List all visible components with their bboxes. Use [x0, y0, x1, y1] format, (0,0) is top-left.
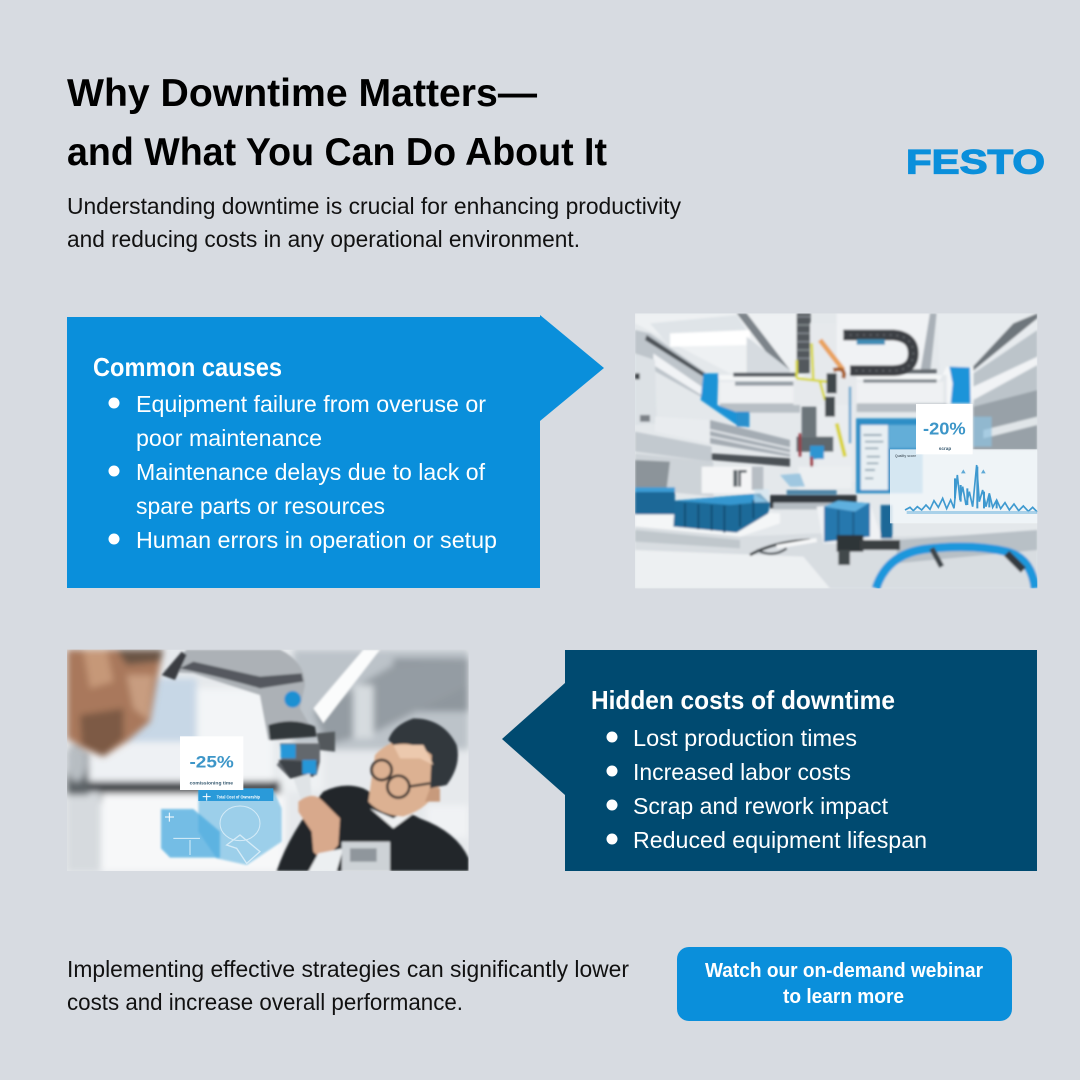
title: [67, 72, 607, 174]
cable chain: [843, 335, 913, 371]
blue gantry ends: [701, 373, 749, 427]
blue hose: [876, 547, 1035, 588]
man on the left: [67, 650, 163, 757]
-20% label: -20%: [923, 418, 966, 438]
monitor: [856, 418, 923, 493]
causes list: spare parts or resources: [136, 493, 385, 519]
hidden costs list: Lost production times: [633, 725, 857, 751]
-25% label: [180, 736, 243, 790]
intro text: Understanding downtime is crucial for enhancing productivity: [67, 193, 681, 219]
call-to-action button: [677, 947, 1012, 1021]
panel: common causes: [67, 315, 604, 588]
quality chart overlay: [890, 449, 1037, 523]
closing text: costs and increase overall performance.: [67, 989, 463, 1015]
table: [635, 507, 780, 537]
gantry beam: [718, 367, 973, 403]
call-to-action button: to learn more: [783, 986, 904, 1008]
heading: common causes: Common causes: [93, 352, 282, 382]
causes list: Human errors in operation or setup: [136, 527, 497, 553]
man on the right: [277, 718, 469, 872]
tooling foreground: [750, 540, 810, 555]
causes list: [108, 391, 497, 553]
FESTO logo: FESTO: [906, 144, 1045, 182]
head: [793, 323, 857, 405]
hidden costs list: Increased labor costs: [633, 759, 851, 785]
photo: engineers with robot arm and -25% overlay: [67, 650, 469, 872]
-25% label: comissioning time: [190, 781, 233, 786]
title: Why Downtime Matters—: [67, 72, 537, 115]
robot arm: [162, 650, 335, 802]
blue arrow panel shape: [67, 315, 604, 588]
total cost overlay: [161, 788, 282, 865]
intro text: [67, 193, 681, 252]
hidden costs list: [606, 725, 927, 853]
call-to-action button: Watch our on-demand webinar: [705, 960, 983, 982]
photo: automation gantry with -20% scrap overlay: [635, 313, 1037, 588]
-25% label: -25%: [189, 753, 234, 772]
causes list: poor maintenance: [136, 425, 322, 451]
title: and What You Can Do About It: [67, 131, 607, 174]
closing text: Implementing effective strategies can significantly lower: [67, 956, 629, 982]
closing text: [67, 956, 629, 1015]
quality chart overlay: Quality score: [895, 454, 916, 458]
blurred background: [67, 650, 469, 872]
-20% label: [916, 404, 973, 454]
hidden costs list: Scrap and rework impact: [633, 793, 888, 819]
causes list: Maintenance delays due to lack of: [136, 459, 485, 485]
total cost overlay: Total Cost of Ownership: [217, 794, 260, 799]
panel: hidden costs of downtime: [502, 650, 1037, 871]
dark arrow panel shape: [502, 650, 1037, 871]
-20% label: scrap: [939, 446, 951, 451]
hidden costs list: Reduced equipment lifespan: [633, 827, 927, 853]
battery blocks: [635, 489, 675, 514]
intro text: and reducing costs in any operational environment.: [67, 226, 580, 252]
causes list: Equipment failure from overuse or: [136, 391, 486, 417]
heading: hidden costs: Hidden costs of downtime: [591, 685, 895, 715]
